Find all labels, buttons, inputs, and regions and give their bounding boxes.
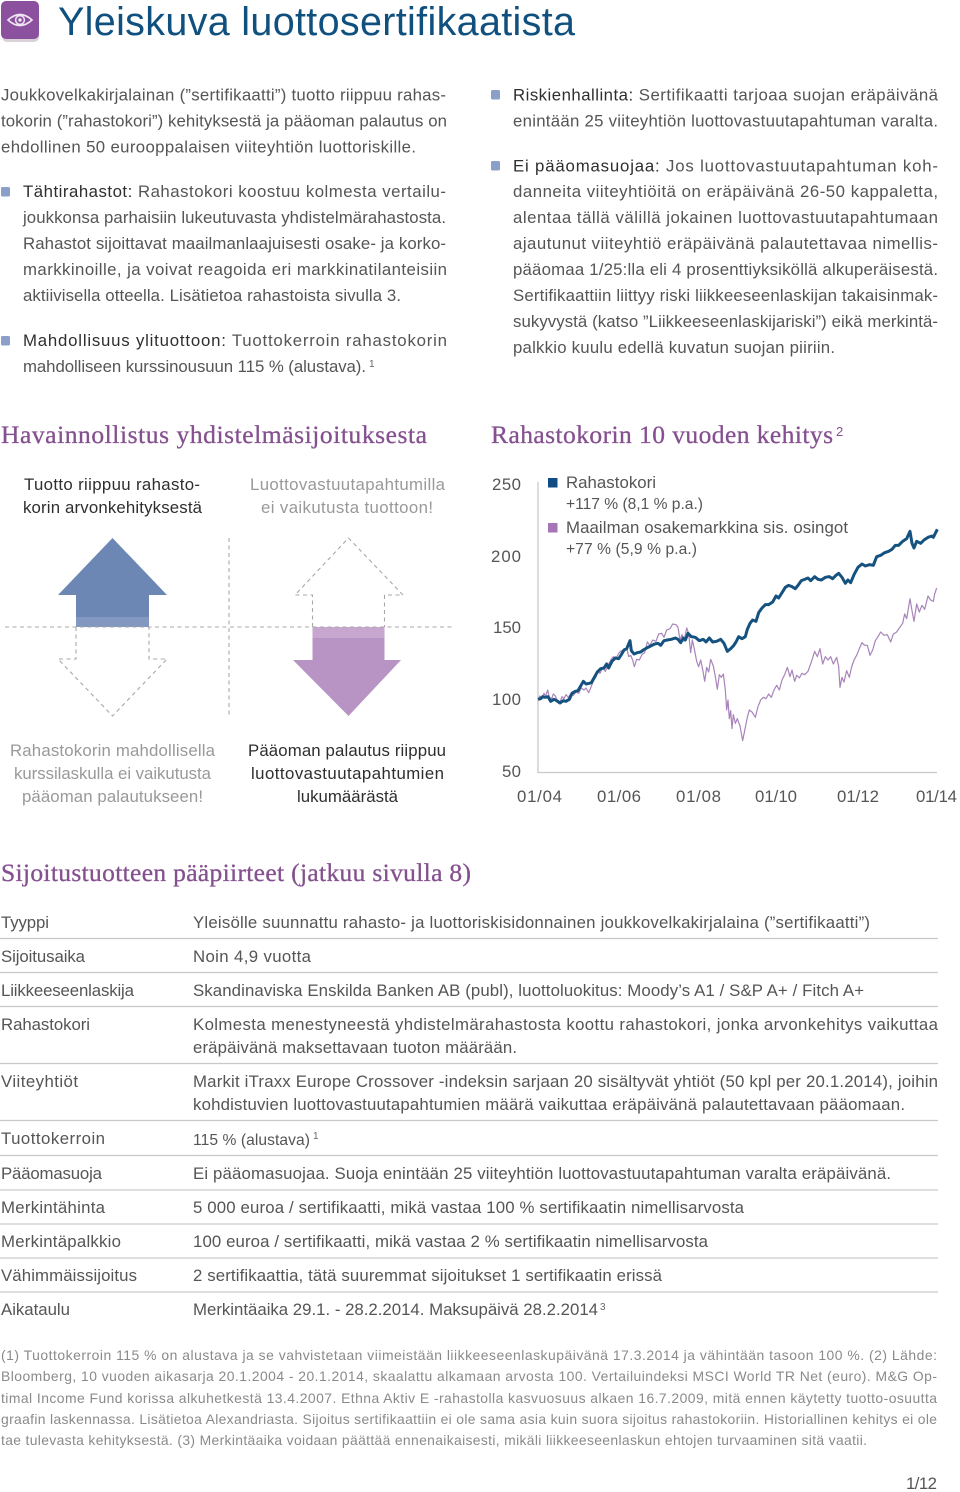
row: Merkintähinta: 5 000 euroa / sertifikaatti, mikä vastaa 100 % sertifikaatin nimellisarvosta [193,1198,745,1217]
caption: index fall no effect: Rahastokorin mahdollisella [10,741,216,760]
row: Merkintäpalkkio: 100 euroa / sertifikaatti, mikä vastaa 2 % sertifikaatin nimellisarvosta [193,1232,709,1251]
row: Aikataulu: Merkintäaika 29.1. - 28.2.2014. Maksupäivä 28.2.2014 [193,1300,598,1319]
bullet: Tähtirahastot: Tähtirahastot: Rahastokori koostuu kolmesta vertailu- [23,182,446,201]
caption: return depends: korin arvonkehityksestä [23,498,203,517]
row: Viiteyhtiöt [1,1072,938,1114]
bullet: Ei pääomasuojaa: sukyvystä (katso ”Liikkeeseenlaskijariski”) eikä merkintä- [513,312,938,331]
y axis labels: 100 [492,690,521,709]
caption: index fall no effect: pääoman palautukseen! [22,787,203,806]
title: Yleiskuva luottosertifikaatista [58,0,575,44]
footnotes [1,1347,937,1448]
row: Sijoitusaika: Sijoitusaika [1,947,86,966]
row: Tyyppi: Yleisölle suunnattu rahasto- ja luottoriskisidonnainen joukkovelkakirjalaina (”sertifikaatti”) [193,913,870,932]
legend: Rahastokori [566,473,656,492]
row: Rahastokori [1,1015,939,1057]
x axis labels: 01/14 [916,787,957,806]
bullet: Mahdollisuus ylituottoon: 1 [369,359,375,370]
caption: capital depends: luottovastuutapahtumien [251,764,444,783]
y axis labels [491,475,521,781]
bullet: Riskienhallinta: Riskienhallinta: Sertifikaatti tarjoaa suojan eräpäivänä [513,86,939,104]
caption: capital depends [248,741,446,806]
caption: capital depends: lukumäärästä [297,787,399,806]
heading: Havainnollistus: Havainnollistus yhdistelmäsijoituksesta [1,420,427,449]
footnotes: (1) Tuottokerroin 115 % on alustava ja se vahvistetaan viimeistään liikkeeseenlaskupäivänä 17.3.2014 ja vähintään tasoon 100 %. (2) Lähde: [1,1347,937,1363]
row: Aikataulu: Aikataulu [1,1300,70,1319]
caption: index fall no effect: kurssilaskulla ei vaikutusta [14,764,212,783]
legend: +77 % (5,9 % p.a.) [566,541,697,558]
intro paragraph [1,86,447,156]
icon: eye badge [1,1,39,42]
caption: no effect on return: Luottovastuutapahtumilla [250,475,446,494]
caption: return depends [23,475,203,517]
bullet: Ei pääomasuojaa: pääomaa 1/25:lla eli 4 prosenttiyksiköllä alkuperäisestä. [513,260,938,279]
caption: index fall no effect [10,741,216,806]
legend [548,473,848,558]
arrow: dashed up [295,538,403,627]
bullet: Riskienhallinta [491,86,939,130]
x axis labels: 01/06 [597,787,641,806]
row: Vähimmäissijoitus: 2 sertifikaattia, tätä suuremmat sijoitukset 1 sertifikaatin erissä [193,1266,663,1285]
bullet: Ei pääomasuojaa: palkkio kuulu edellä kuvatun suojan piiriin. [513,338,835,357]
row: Tuottokerroin: 1 [313,1131,319,1142]
caption: no effect on return [250,475,446,517]
intro paragraph: tokorin (”rahastokori”) kehityksestä ja pääoman palautus on [1,112,447,130]
bullet: Tähtirahastot [1,182,447,305]
bullet: Ei pääomasuojaa [491,156,938,357]
x axis labels: 01/10 [755,787,797,806]
x axis labels: 01/04 [517,787,562,806]
footnotes: Bloomberg, 10 vuoden aikasarja 20.1.2004 - 20.1.2014, skaalattu alkamaan arvosta 100. Vertailuindeksi MSCI World TR Net (euro). M&G Op- [1,1368,937,1384]
row: Merkintähinta: Merkintähinta [1,1198,106,1217]
bullet: Tähtirahastot: aktiivisella otteella. Lisätietoa rahastoista sivulla 3. [23,286,401,305]
row: Rahastokori: Kolmesta menestyneestä yhdistelmärahastosta koottu rahastokori, jonka arvonkehitys vaikuttaa [193,1015,939,1034]
y axis labels: 150 [493,618,521,637]
bullet: Mahdollisuus ylituottoon: mahdolliseen kurssinousuun 115 % (alustava). [23,357,366,376]
bullet: Mahdollisuus ylituottoon [1,331,447,376]
row: Merkintäpalkkio: Merkintäpalkkio [1,1232,121,1251]
line chart: basket development [491,473,957,806]
bullet: Ei pääomasuojaa: Ei pääomasuojaa: Jos luottovastuutapahtuman koh- [513,156,938,176]
bullet: Tähtirahastot: joukkonsa parhaisiin lukeutuvasta yhdistelmärahastosta. [22,208,446,227]
row: Sijoitusaika [1,947,312,966]
legend: +117 % (8,1 % p.a.) [566,496,703,513]
row: Tyyppi: Tyyppi [1,913,49,932]
caption: no effect on return: ei vaikutusta tuottoon! [261,498,433,517]
row: Vähimmäissijoitus: Vähimmäissijoitus [1,1266,137,1285]
x axis labels: 01/08 [676,787,721,806]
row: Pääomasuoja: Pääomasuoja [1,1164,103,1183]
row: Tuottokerroin [1,1129,319,1149]
row: Aikataulu: 3 [600,1302,606,1313]
footnotes: tae tulevasta kehityksestä. (3) Merkintäaika voidaan päättää ennenaikaisesti, mikäli liikkeeseenlaskun ehtojen turvaaminen sitä vaatii. [1,1432,867,1448]
heading: Rahastokorin kehitys: 2 [836,424,843,439]
x axis labels [517,787,957,806]
arrow: purple down [293,627,401,716]
caption: return depends: Tuotto riippuu rahasto- [24,475,200,494]
x axis labels: 01/12 [837,787,879,806]
row: Rahastokori: Rahastokori [1,1015,90,1034]
arrow: blue up [58,538,167,627]
bullet: Riskienhallinta: enintään 25 viiteyhtiön luottovastuutapahtuman varalta. [513,112,938,130]
intro paragraph: ehdollinen 50 eurooppalaisen viiteyhtiön luottoriskille. [1,138,416,156]
row: Pääomasuoja: Ei pääomasuojaa. Suoja enintään 25 viiteyhtiön luottovastuutapahtuman varalta eräpäivänä. [193,1164,891,1183]
intro paragraph: Joukkovelkakirjalainan (”sertifikaatti”) tuotto riippuu rahas- [1,86,446,104]
row: Viiteyhtiöt: kohdistuvien luottovastuutapahtumien määrä vaikuttaa eräpäivänä palautettavaan pääomaan. [193,1095,905,1114]
bullet: Tähtirahastot: Rahastot sijoittavat maailmanlaajuisesti osake- ja korko- [23,234,446,253]
bullet: Ei pääomasuojaa: alentaa tällä välillä jokainen luottovastuutapahtumaan [513,208,938,227]
series: world equities [538,588,937,741]
row: Sijoitusaika: Noin 4,9 vuotta [193,947,312,966]
bullet: Ei pääomasuojaa: danneita viiteyhtiöitä on eräpäivänä 26-50 kappaletta, [513,182,938,201]
caption: capital depends: Pääoman palautus riippuu [248,741,446,760]
text block: right column [491,86,939,357]
bullet: Mahdollisuus ylituottoon: Mahdollisuus ylituottoon: Tuottokerroin rahastokorin [23,331,447,350]
bullet: Tähtirahastot: markkinoille, ja voivat reagoida eri markkinatilanteisiin [23,260,447,279]
row: Tuottokerroin: 115 % (alustava) [193,1132,310,1149]
row: Tuottokerroin: Tuottokerroin [1,1129,105,1148]
series: fund basket [538,529,937,703]
row: Viiteyhtiöt: Markit iTraxx Europe Crossover -indeksin sarjaan 20 sisältyvät yhtiöt (50 kpl per 20.1.2014), joihin [193,1072,938,1091]
heading: Rahastokorin kehitys: Rahastokorin 10 vuoden kehitys [491,420,833,449]
arrow: dashed down [58,627,167,716]
y axis labels: 250 [492,475,521,494]
bullet: Ei pääomasuojaa: ajautunut viiteyhtiö eräpäivänä palautettavaa nimellis- [513,234,938,253]
heading: Sijoitustuotteen pääpiirteet: Sijoitustuotteen pääpiirteet (jatkuu sivulla 8) [1,858,471,887]
footnotes: graafin laskennassa. Lisätietoa Alexandriasta. Sijoitus sertifikaattiin ei ole sama asia kuin suora sijoitus rahastokoriin. Historiallinen kehitys ei ole [1,1411,937,1427]
text block: left column [1,86,447,376]
legend: Maailman osakemarkkina sis. osingot [566,518,848,537]
row: Rahastokori: eräpäivänä maksettavaan tuoton määrään. [193,1038,517,1057]
table: key features [0,913,939,1319]
footnotes: timal Income Fund korissa alkuhetkestä 13.4.2007. Ethna Aktiv E -rahastolla kasvuosuus alkaen 16.7.2009, mitä ennen käytetty tuotto-osuutta [1,1390,937,1406]
bullet: Ei pääomasuojaa: Sertifikaattiin liittyy riski liikkeeseenlaskijan takaisinmak- [513,286,938,305]
y axis labels: 50 [502,762,521,781]
row: Liikkeeseenlaskija: Skandinaviska Enskilda Banken AB (publ), luottoluokitus: Moody’s A1 / S&P A+ / Fitch A+ [193,981,864,1000]
row: Aikataulu [1,1300,606,1319]
diagram: payoff arrows [5,475,453,806]
y axis labels: 200 [491,547,521,566]
row: Liikkeeseenlaskija: Liikkeeseenlaskija [1,981,135,1000]
row: Viiteyhtiöt: Viiteyhtiöt [1,1072,78,1091]
